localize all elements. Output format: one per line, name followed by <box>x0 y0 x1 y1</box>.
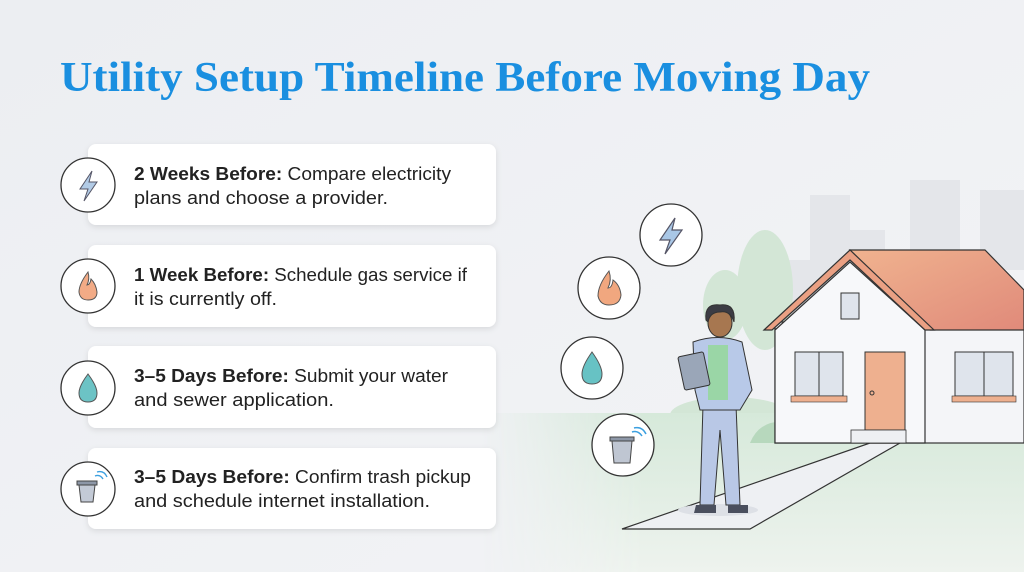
windows & door <box>841 293 859 319</box>
icon: water drop <box>61 361 115 415</box>
icon bubble: water drop <box>561 337 623 399</box>
path <box>622 443 900 529</box>
background trees <box>670 230 793 433</box>
card 2: 1 Week Before: Schedule gas service if <box>134 265 468 285</box>
icon: flame <box>61 259 115 313</box>
ground <box>480 413 1024 572</box>
title: Utility Setup Timeline Before Moving Day <box>60 55 870 101</box>
card 1 <box>61 144 496 225</box>
card 2: it is currently off. <box>134 289 277 309</box>
card 4: and schedule internet installation. <box>134 491 430 511</box>
icon: trash <box>61 462 115 516</box>
bushes <box>750 417 840 443</box>
card 4: 3–5 Days Before: Confirm trash pickup <box>134 467 471 487</box>
icon: lightning <box>61 158 115 212</box>
illustration: house scene <box>480 180 1024 572</box>
icon bubble: flame <box>578 257 640 319</box>
roof <box>850 250 1024 330</box>
house body <box>775 322 1024 443</box>
card 3: 3–5 Days Before: Submit your water <box>134 366 448 386</box>
card 4 <box>61 448 496 529</box>
icon bubble: lightning <box>640 204 702 266</box>
card 1: 2 Weeks Before: Compare electricity <box>134 164 451 184</box>
illustration: person with clipboard <box>678 305 758 516</box>
card 3 <box>61 346 496 428</box>
background buildings <box>775 180 1024 345</box>
card 2 <box>61 245 496 327</box>
card 1: plans and choose a provider. <box>134 188 388 208</box>
card 3: and sewer application. <box>134 390 334 410</box>
icon bubble: trash with wifi <box>592 414 654 476</box>
